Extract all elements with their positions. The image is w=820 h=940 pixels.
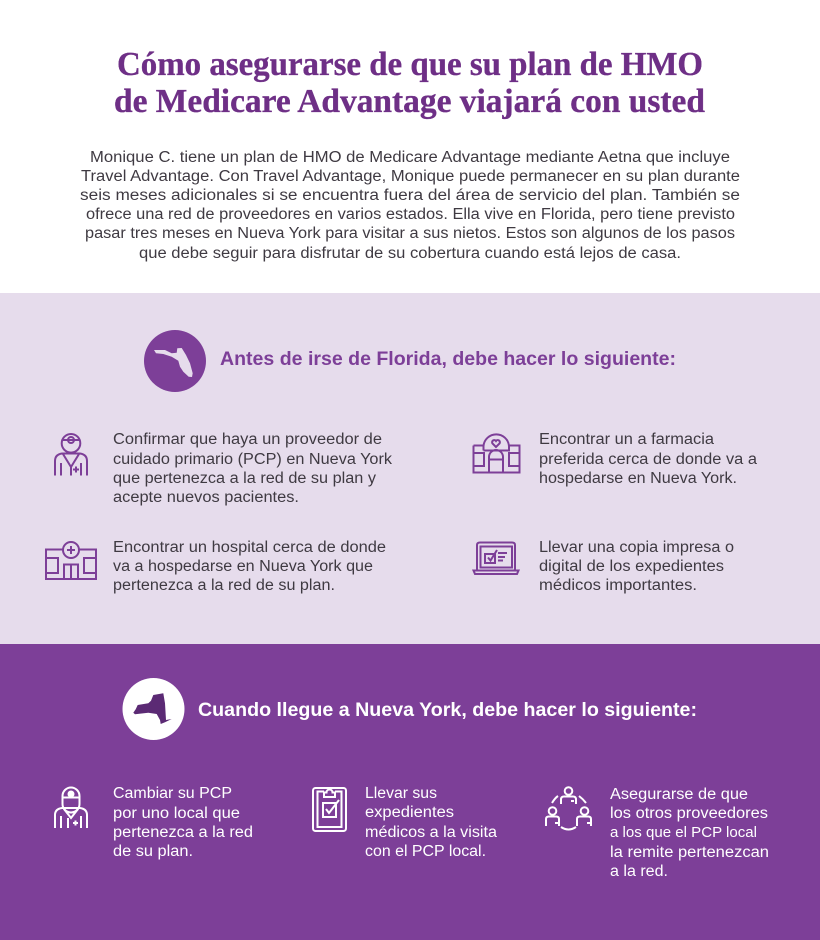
title: Cómo asegurarse de que su plan de HMO xyxy=(117,46,703,83)
text: bring records: con el PCP local. xyxy=(365,843,486,860)
text: other providers: a la red. xyxy=(610,863,668,880)
icon: laptop with records xyxy=(474,542,518,574)
icon: clipboard xyxy=(313,788,346,831)
text: records copy: Llevar una copia impresa o xyxy=(539,539,734,556)
text: primary care provider: acepte nuevos pacientes. xyxy=(113,489,299,506)
text: other providers: los otros proveedores xyxy=(610,805,768,822)
intro paragraph: Travel Advantage. Con Travel Advantage, Monique puede permanecer en su plan durante xyxy=(81,168,740,185)
text: change PCP xyxy=(113,785,253,860)
text: primary care provider: cuidado primario (PCP) en Nueva York xyxy=(113,451,392,468)
text: pharmacy: Encontrar un a farmacia xyxy=(539,431,714,448)
text: pharmacy: preferida cerca de donde va a xyxy=(539,451,757,468)
text: hospital: pertenezca a la red de su plan. xyxy=(113,577,335,594)
intro paragraph: Monique C. tiene un plan de HMO de Medicare Advantage mediante Aetna que incluye xyxy=(90,149,730,166)
panel: before leaving Florida xyxy=(0,293,820,644)
text: primary care provider: que pertenezca a la red de su plan y xyxy=(113,470,376,487)
icon: provider network xyxy=(546,787,591,830)
text: primary care provider xyxy=(113,431,392,506)
text: change PCP: de su plan. xyxy=(113,843,193,860)
icon: doctor xyxy=(55,434,87,476)
text: pharmacy: hospedarse en Nueva York. xyxy=(539,470,737,487)
text: bring records xyxy=(365,785,497,860)
text: other providers: la remite pertenezcan xyxy=(610,844,769,861)
text: hospital: va a hospedarse en Nueva York que xyxy=(113,558,373,575)
intro paragraph: seis meses adicionales si se encuentra fuera del área de servicio del plan. También se xyxy=(80,187,740,204)
text: change PCP: pertenezca a la red xyxy=(113,824,253,841)
text: records copy: digital de los expedientes xyxy=(539,558,724,575)
intro paragraph xyxy=(80,149,740,262)
text: records copy: médicos importantes. xyxy=(539,577,697,594)
intro paragraph: pasar tres meses en Nueva York para visitar a sus nietos. Estos son algunos de los pasos xyxy=(85,225,735,242)
text: other providers xyxy=(610,786,769,880)
text: pharmacy xyxy=(539,431,757,487)
text: bring records: médicos a la visita xyxy=(365,824,497,841)
icon: doctor white xyxy=(55,788,87,828)
title: de Medicare Advantage viajará con usted xyxy=(114,83,705,120)
text: hospital xyxy=(113,539,386,594)
text: bring records: Llevar sus xyxy=(365,785,437,802)
text: other providers: Asegurarse de que xyxy=(610,786,748,803)
icon: Florida xyxy=(144,330,206,392)
intro paragraph: ofrece una red de proveedores en varios estados. Ella vive en Florida, pero tiene previsto xyxy=(86,206,735,223)
text: primary care provider: Confirmar que haya un proveedor de xyxy=(113,431,382,448)
text: other providers: a los que el PCP local xyxy=(610,824,757,841)
text: change PCP: por uno local que xyxy=(113,805,240,822)
text: hospital: Encontrar un hospital cerca de donde xyxy=(113,539,386,556)
intro paragraph: que debe seguir para disfrutar de su cobertura cuando está lejos de casa. xyxy=(139,245,681,262)
title xyxy=(114,46,705,120)
heading: arriving: Cuando llegue a Nueva York, debe hacer lo siguiente: xyxy=(198,700,697,721)
icon: hospital xyxy=(46,542,96,579)
panel: arriving in New York xyxy=(0,644,820,940)
heading: before leaving: Antes de irse de Florida, debe hacer lo siguiente: xyxy=(220,349,676,370)
icon: pharmacy xyxy=(474,434,520,473)
text: bring records: expedientes xyxy=(365,804,454,821)
icon: New York xyxy=(122,678,184,740)
text: records copy xyxy=(539,539,734,594)
text: change PCP: Cambiar su PCP xyxy=(113,785,232,802)
